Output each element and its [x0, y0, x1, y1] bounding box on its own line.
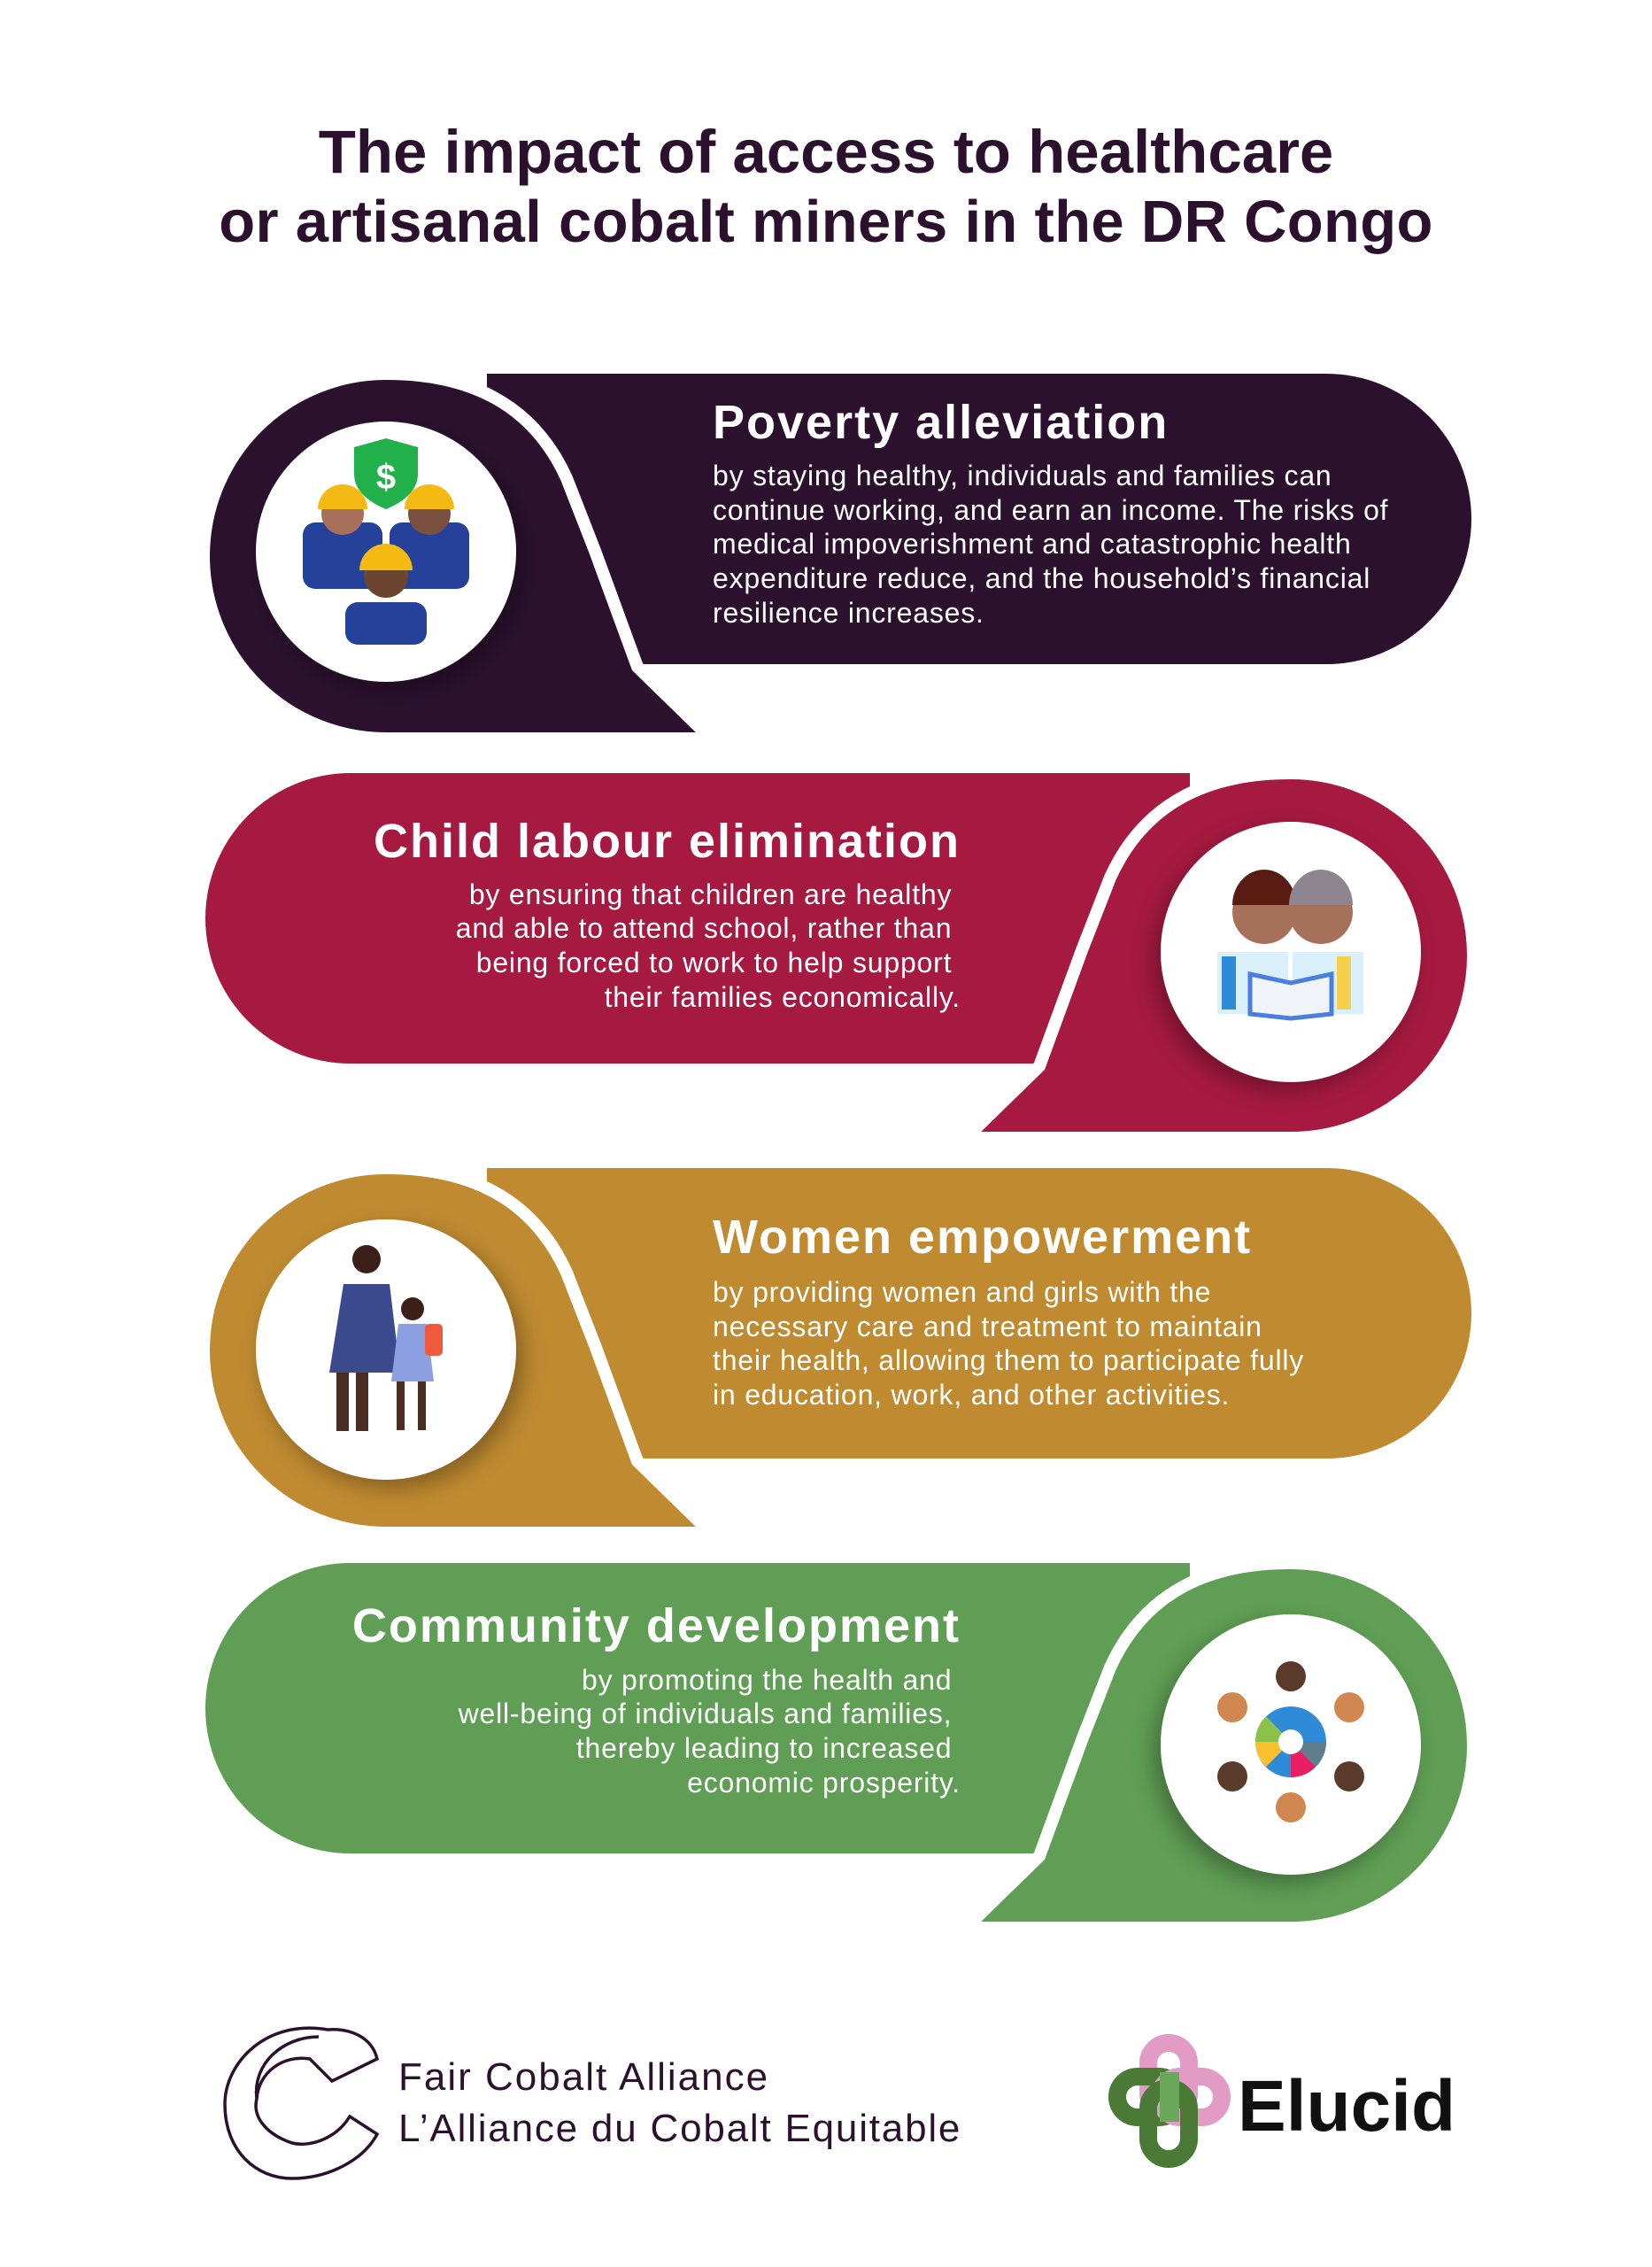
title: The impact of access to healthcare	[319, 118, 1333, 186]
panel shape: community	[205, 1563, 1473, 1928]
logo: Fair Cobalt Alliance: Fair Cobalt Alliance	[398, 2055, 769, 2099]
panel: women empowerment	[204, 1168, 1471, 1533]
body: child labour: their families economically.	[605, 981, 961, 1013]
title: or artisanal cobalt miners in the DR Congo	[219, 189, 1433, 255]
panel: child labour elimination	[205, 773, 1473, 1138]
body: poverty alleviation: by staying healthy, individuals and families can	[713, 460, 1332, 491]
icon: Elucid cross	[1117, 2043, 1222, 2159]
heading: poverty alleviation: Poverty alleviation	[713, 396, 1169, 449]
heading: women empowerment: Women empowerment	[713, 1211, 1252, 1264]
body: child labour: and able to attend school, rather than	[456, 912, 952, 944]
logo: Fair Cobalt Alliance	[225, 2028, 961, 2178]
body: women: necessary care and treatment to maintain	[713, 1311, 1262, 1342]
logo: Elucid: Elucid	[1238, 2066, 1455, 2147]
icon: C outline	[225, 2028, 377, 2178]
body: community: economic prosperity.	[687, 1767, 961, 1799]
icon: children with book	[1217, 870, 1363, 1018]
body: child labour: being forced to work to help support	[476, 947, 952, 979]
body: community: well-being of individuals and families,	[458, 1698, 952, 1729]
logo: Fair Cobalt Alliance: L’Alliance du Cobalt Equitable	[398, 2107, 961, 2150]
body: poverty alleviation: continue working, and earn an income. The risks of	[713, 494, 1388, 526]
body: community: by promoting the health and	[582, 1664, 952, 1696]
icon: miners with dollar shield: $	[376, 458, 396, 497]
body: child labour: by ensuring that children are healthy	[469, 878, 952, 910]
icon: community circle	[1217, 1661, 1364, 1822]
heading: community development: Community development	[352, 1599, 961, 1652]
logo: Elucid	[1117, 2043, 1455, 2159]
panel shape: child labour	[205, 773, 1473, 1138]
body: women: by providing women and girls with the	[713, 1276, 1211, 1308]
body: community: thereby leading to increased	[576, 1732, 952, 1764]
body: poverty alleviation: expenditure reduce, and the household’s financial	[713, 562, 1370, 594]
heading: child labour elimination: Child labour elimination	[374, 815, 961, 868]
icon: woman and girl	[329, 1245, 443, 1431]
body: women: their health, allowing them to participate fully	[713, 1344, 1304, 1376]
panel: poverty alleviation	[204, 374, 1471, 739]
body: poverty alleviation: medical impoverishment and catastrophic health	[713, 528, 1352, 560]
body: poverty alleviation: resilience increases.	[713, 597, 984, 629]
title	[219, 118, 1433, 255]
panel shape: women	[204, 1168, 1471, 1533]
panel: community development	[205, 1563, 1473, 1928]
panel shape: poverty	[204, 374, 1471, 739]
icon: miners with dollar shield	[303, 438, 469, 645]
body: women: in education, work, and other activities.	[713, 1379, 1230, 1411]
